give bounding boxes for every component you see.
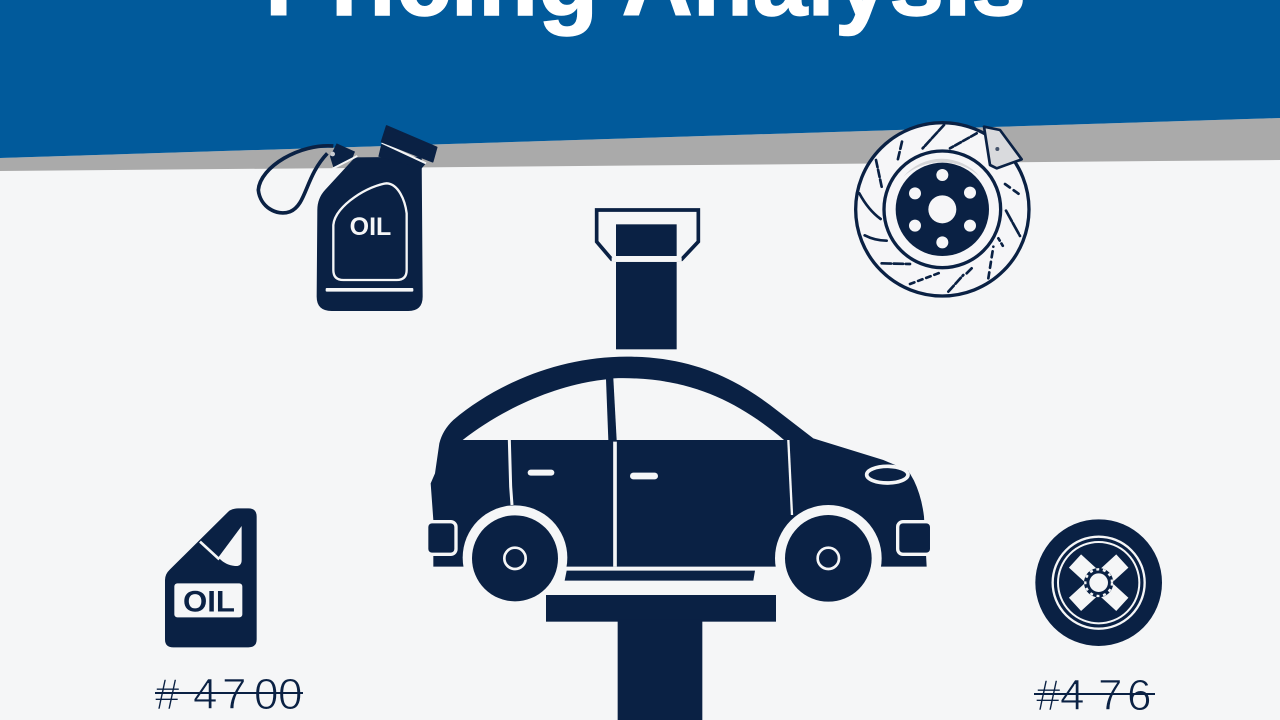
icon: car on lift [427,357,932,720]
icon: tire and wheel [1035,519,1162,646]
icon: oil jug with cap and rope [258,126,437,311]
icon: oil jug with cap and rope: OIL [350,213,391,241]
sill bar [565,571,755,581]
door lines and handles [509,440,792,567]
windows [463,379,608,440]
lift arm: upper column and bracket [597,210,698,349]
icon: oil container [165,508,257,647]
headlight [867,466,908,483]
lift platform [546,595,776,622]
lift post [618,620,702,720]
oil label [174,583,242,617]
bumpers [427,522,456,554]
car body [431,357,927,567]
icon: brake disc with caliper [856,123,1029,296]
header banner [0,0,1280,158]
price: tire: #476 [1036,671,1151,720]
handle cutout [218,526,242,566]
price: oil: #4700 [155,670,302,719]
wheel arches [463,505,567,610]
wheels [472,515,558,601]
icon: oil container: OIL [183,586,235,619]
